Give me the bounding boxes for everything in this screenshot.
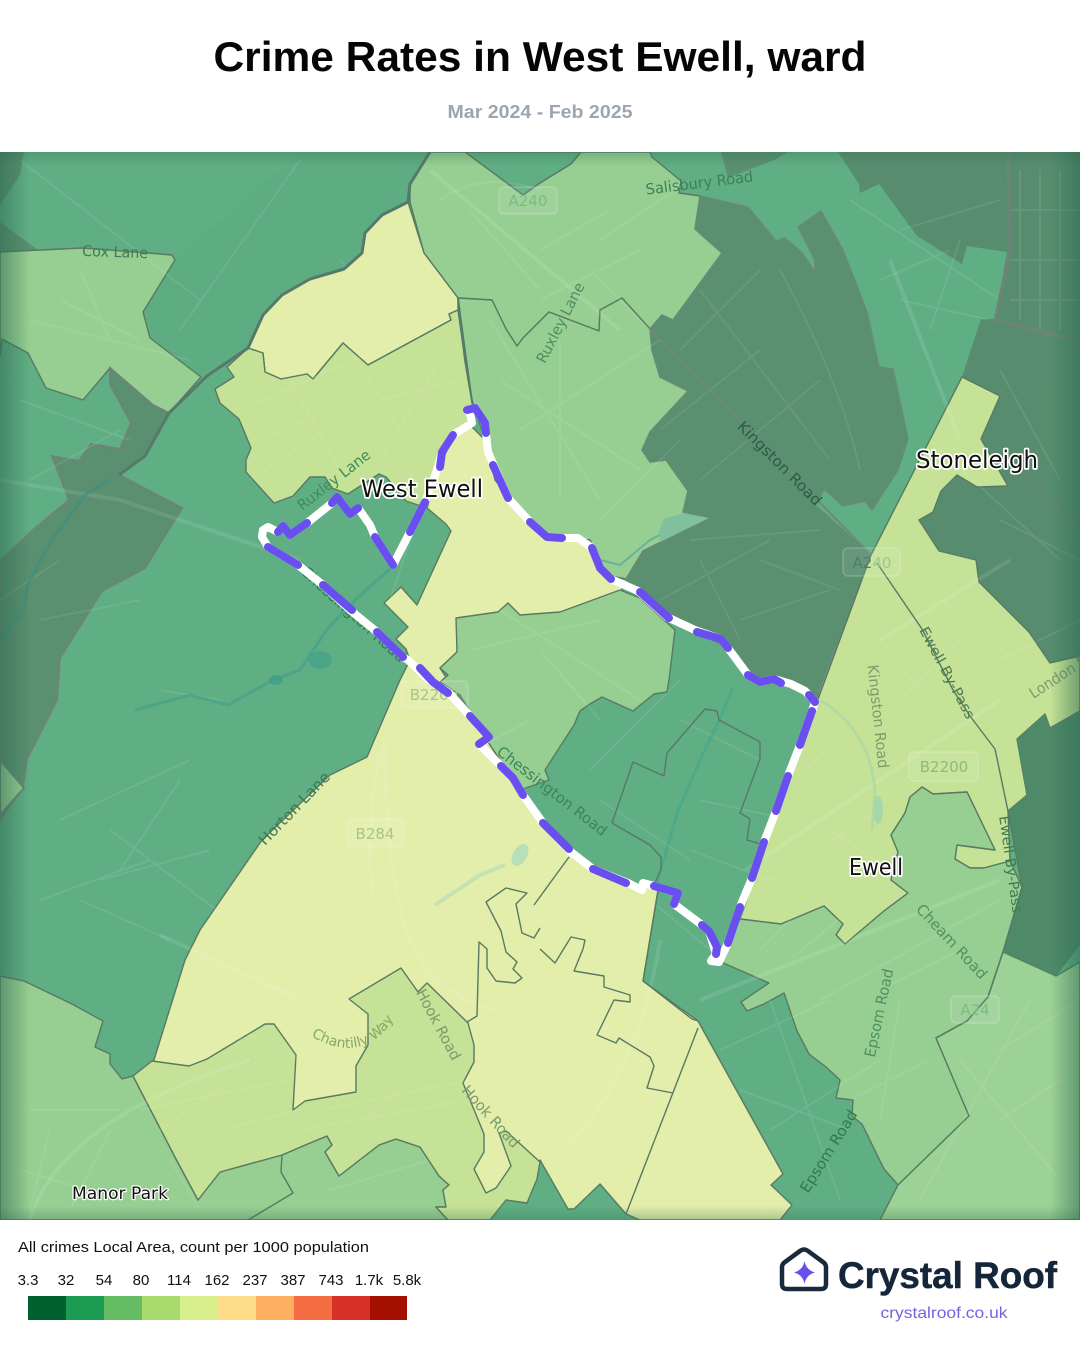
road label: Hook Road north: Hook Road	[412, 986, 465, 1063]
road badge: A24	[951, 996, 999, 1023]
map edge vignette	[0, 152, 1080, 1220]
road label: Chessington Road east: Chessington Road	[493, 742, 611, 840]
icon: house with star	[782, 1250, 826, 1289]
road label: Ruxley Lane north: Ruxley Lane	[533, 279, 589, 366]
legend tick labels: 162	[204, 1272, 230, 1289]
road badge: B284	[347, 819, 404, 847]
road badge: B2200 east: B2200	[920, 758, 968, 776]
ward boundary: West Ewell	[262, 408, 815, 962]
extra boundary lines	[119, 152, 1080, 1220]
area: top-left dark corner	[0, 152, 24, 205]
place label: Stoneleigh: Stoneleigh	[916, 446, 1038, 474]
area: north-west darker tone	[143, 152, 430, 377]
road label: Kingston Road east: Kingston Road	[864, 664, 892, 769]
road label: Chantilly Way: Chantilly Way	[314, 1015, 393, 1048]
legend tick labels: 1.7k	[355, 1272, 384, 1289]
legend tick labels: 743	[318, 1272, 344, 1289]
legend tick labels	[18, 1272, 422, 1289]
road label: Chessington Road west: Chessington Road	[297, 562, 410, 666]
legend tick labels: 237	[242, 1272, 268, 1289]
place label: West Ewell: West Ewell	[361, 475, 483, 503]
wordmark: Crystal Roof	[838, 1255, 1058, 1296]
legend tick labels: 387	[280, 1272, 306, 1289]
legend tick labels: 32	[58, 1272, 74, 1289]
legend colour scale	[28, 1296, 407, 1320]
base area: mid green neighbourhoods	[0, 152, 1080, 1220]
legend tick labels: 80	[133, 1272, 149, 1289]
area: top dark strip near Salisbury Road	[721, 152, 788, 178]
road badge: A24: A24	[960, 1001, 990, 1019]
area: left dark wedge	[0, 222, 38, 252]
road badge: A240 east: A240	[853, 554, 891, 572]
road network	[0, 160, 1080, 1220]
road label: Kingston Road: Kingston Road	[734, 418, 825, 509]
title: Crime Rates in West Ewell, ward	[214, 33, 867, 80]
road badge: B2200 west: B2200	[410, 686, 458, 704]
road badge: B2200 west	[401, 681, 468, 708]
road label: Horton Lane: Horton Lane	[255, 768, 334, 849]
road label: Ewell By-Pass north: Ewell By-Pass	[916, 624, 978, 722]
area: Kingston Road dark block	[626, 196, 908, 702]
road label: Cox Lane: Cox Lane	[82, 242, 148, 262]
area: small light patch at left edge	[0, 760, 24, 815]
road label: Ruxley Lane south: Ruxley Lane	[294, 446, 374, 514]
area: south-west light green	[0, 976, 449, 1220]
area: north pale yellow	[248, 202, 458, 379]
road label: Salisbury Road: Salisbury Road	[645, 168, 754, 199]
road label: Epsom Road south: Epsom Road	[796, 1107, 861, 1196]
choropleth map	[0, 152, 1080, 1220]
road label: Hook Road south: Hook Road	[458, 1082, 524, 1152]
legend tick labels: 54	[96, 1272, 112, 1289]
legend tick labels: 5.8k	[393, 1272, 422, 1289]
area: north West Ewell yellow-green	[215, 310, 473, 508]
subtitle: date range: Mar 2024 - Feb 2025	[448, 102, 632, 122]
road badge: B2200 east	[909, 752, 978, 781]
road badge: A240 north: A240	[509, 192, 547, 210]
road label: Epsom Road north: Epsom Road	[861, 967, 897, 1059]
area: Stoneleigh and Ewell yellow-green	[740, 377, 1080, 944]
road label: Ewell By-Pass south: Ewell By-Pass	[995, 815, 1025, 914]
area: Cox Lane light green	[0, 248, 201, 413]
road badge: A240 east	[843, 548, 900, 576]
legend	[18, 1239, 422, 1320]
road badge: B284: B284	[356, 825, 394, 843]
area: north centre mid green triangle	[465, 152, 581, 195]
place label: Manor Park: Manor Park	[72, 1184, 168, 1204]
area: Ruxley Lane light green	[458, 298, 709, 579]
legend tick labels: 3.3	[18, 1272, 38, 1289]
logo: Crystal Roof	[782, 1250, 1058, 1322]
legend tick labels: 114	[167, 1272, 191, 1289]
place label: Ewell: Ewell	[849, 855, 903, 881]
area: large south pale yellow	[133, 422, 792, 1220]
area: north-east dark block	[838, 152, 1080, 663]
road label: Cheam Road: Cheam Road	[912, 900, 991, 983]
legend title: All crimes Local Area, count per 1000 population	[18, 1239, 369, 1256]
road badge: A240 north	[499, 187, 557, 214]
area: west dark block	[0, 368, 182, 820]
area: Ewell south light green	[721, 787, 1022, 1185]
website link: crystalroof.co.uk	[880, 1305, 1009, 1322]
area: south-east light green	[880, 952, 1080, 1220]
area: right dark strip	[1003, 711, 1080, 976]
area: north light green	[410, 152, 722, 346]
area: central light green above Chessington Road	[440, 590, 675, 790]
streams and ponds	[0, 480, 883, 905]
area: Hook Road yellow-green	[133, 968, 540, 1220]
